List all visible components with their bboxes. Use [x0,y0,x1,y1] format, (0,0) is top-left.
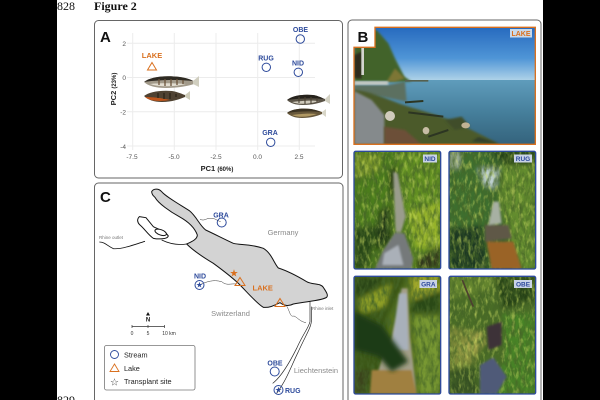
OBE photo tag [514,280,532,288]
panel letter A: A [100,29,111,46]
x axis tick labels: -7.5 [126,154,138,161]
RUG photo tag [514,154,532,163]
LAKE photo tag [510,29,532,38]
panel C: map [94,183,343,400]
OBE photo tag: OBE [516,282,531,288]
lower lake and outlet [138,217,168,239]
x axis tick labels: -5.0 [168,154,180,161]
place names: Switzerland [211,309,250,318]
x axis tick labels: 2.5 [294,154,304,161]
photo: RUG stream [448,150,536,270]
map legend: Stream [124,350,148,360]
north arrow and scale bar [131,312,176,337]
OBE site [267,360,283,376]
GRA photo tag [420,280,437,288]
x axis title: PC1 (60%) [201,164,233,173]
x axis tick labels: 0.0 [253,154,262,161]
panel B: photographs [345,20,545,400]
photo: GRA stream [353,276,442,395]
NID photo tag: NID [424,156,436,163]
LAKE marker [142,51,162,70]
LAKE map label: LAKE [252,284,273,292]
RUG photo tag: RUG [516,156,530,163]
lake map [99,189,327,393]
north arrow and scale bar: 0 [131,331,134,337]
stream markers [262,35,304,146]
panel A: PCA scatter plot [94,20,342,178]
fish: stream female [287,109,326,118]
y axis tick labels: 0 [122,75,126,82]
north arrow and scale bar: 5 [147,331,150,337]
stream labels: GRA [262,130,278,137]
NID site [194,274,206,290]
y axis tick labels: -2 [120,110,126,116]
NID photo tag [423,154,437,163]
NID site: NID [194,274,206,280]
NID site: ★ [196,280,203,290]
RUG site: ★ [275,386,282,394]
place names: Germany [268,228,299,237]
LAKE marker: LAKE [142,51,162,60]
fish: lake female [144,91,190,102]
y axis title: PC2 (23%) [109,73,118,105]
y axis tick labels: 2 [122,41,126,48]
RUG site: RUG [285,388,301,395]
panel letter C: C [100,189,111,206]
x axis tick labels: -2.5 [210,154,222,161]
stream labels: OBE [293,27,308,34]
place names: Liechtenstein [294,366,338,375]
RUG site [274,386,301,395]
map legend: Lake [124,364,140,373]
fish: lake male [144,76,199,88]
river labels: Rhine inlet [312,306,334,311]
stream labels: RUG [258,56,274,62]
y axis tick labels: -4 [120,144,126,151]
map legend: Transplant site [124,377,172,386]
plot grid [127,33,315,150]
north arrow and scale bar: N [146,318,150,324]
map legend: ☆ [110,378,119,388]
north arrow and scale bar: 10 km [162,331,176,337]
GRA photo tag: GRA [421,282,436,288]
photo: OBE stream [448,276,536,395]
lake markers on map [235,278,285,306]
x axis tick labels [126,154,304,161]
panel letter B: B [358,29,368,46]
LAKE photo tag: LAKE [511,31,531,38]
place names [211,228,338,375]
river labels: Rhine outlet [99,235,124,240]
orange transplant star: ★ [230,268,239,280]
upper lake body [152,189,327,307]
river labels [99,235,334,311]
GRA site: GRA [213,212,229,220]
OBE site: OBE [267,360,283,368]
photo: lake shoreline [352,25,538,147]
map legend [104,346,195,390]
fish: stream male [287,94,330,105]
stream labels: NID [292,60,304,68]
photo: NID stream [353,150,442,270]
y axis tick labels [120,41,126,151]
GRA site [213,212,229,227]
stream labels [258,27,308,137]
rivers and streams [273,302,310,383]
